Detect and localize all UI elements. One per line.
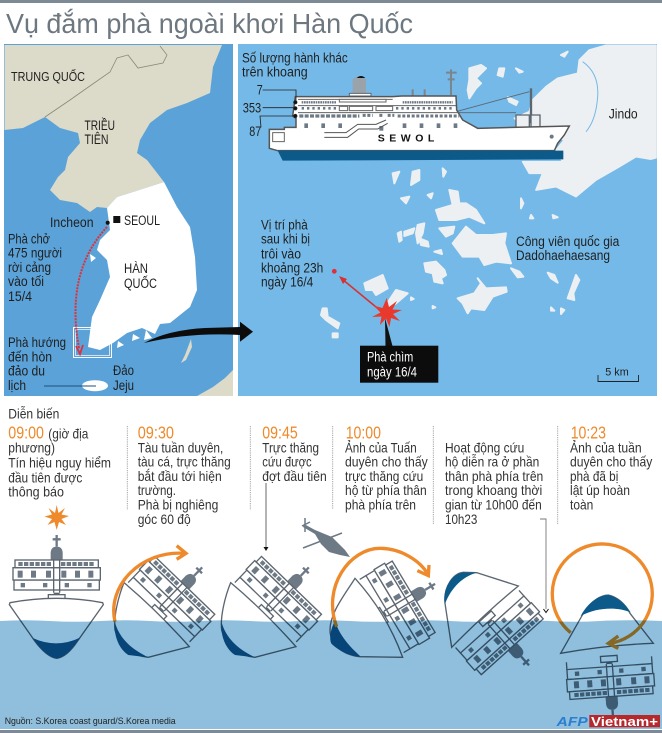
label: Incheon: Incheon <box>50 215 94 230</box>
arrow: first rescue <box>264 483 268 551</box>
event 09:45: cứu được <box>262 454 312 470</box>
label: national park <box>516 234 620 263</box>
top rule <box>0 0 662 3</box>
event 10:00: 10:00 <box>346 422 381 442</box>
arrow: rescue zone <box>540 519 548 612</box>
event rescue window: trong khoang thời <box>445 482 542 498</box>
source: Nguồn: S.Korea coast guard/S.Korea media <box>5 716 176 727</box>
callout: sinking <box>360 346 438 383</box>
helicopter <box>302 518 350 557</box>
route: red dotted <box>76 227 107 354</box>
leader line: Jeju <box>44 385 96 387</box>
text: passengers per deck <box>242 51 348 80</box>
text: destination <box>8 335 66 393</box>
text: drift position: sau khi bị <box>261 231 310 246</box>
orange rotation arrow: ship 4 <box>333 548 429 627</box>
ship 6: capsized <box>561 595 657 725</box>
orange rotation arrow: ship 6 <box>552 544 652 648</box>
scale bar <box>598 367 638 382</box>
passenger leader lines <box>260 90 297 127</box>
ship name: SEWOL <box>378 133 435 145</box>
event 09:30: 09:30 <box>138 422 174 442</box>
heading: timeline: Diễn biến <box>8 405 59 421</box>
event 10:00: duyên cho thấy <box>345 454 428 470</box>
ship 1: upright <box>9 535 103 658</box>
event 09:45: 09:45 <box>262 422 298 442</box>
island: Jeju <box>82 380 108 391</box>
scale bar: 5 km <box>605 367 629 379</box>
event rescue window: Hoạt động cứu <box>445 439 524 455</box>
callout pointer <box>385 318 392 346</box>
text: destination: đến hòn <box>8 350 52 364</box>
ship 3: tilted with helicopter rescue <box>221 537 340 657</box>
arrow: drift direction <box>339 276 376 307</box>
panel: Korea map <box>4 44 233 396</box>
label: Trieu Tien <box>84 118 115 147</box>
event 09:30: tàu cá, trực thăng <box>138 454 231 470</box>
panel: detail map <box>238 44 657 396</box>
event 10:23: 10:23 <box>571 422 606 442</box>
label: national park: Công viên quốc gia <box>516 234 620 249</box>
event 09:00: (giờ địa <box>48 425 88 441</box>
timeline illustration <box>0 518 662 729</box>
ship: Sewol profile <box>269 69 569 161</box>
text: ferry departure: rời cảng <box>8 260 51 275</box>
event 09:45: đợt đầu tiên <box>262 468 327 484</box>
event 09:00: đầu tiên được <box>8 469 82 485</box>
event 09:30: góc 60 độ <box>138 511 191 527</box>
event 10:00: trực thăng cứu <box>345 468 423 484</box>
event 10:23 <box>570 422 652 512</box>
event rescue window: gian từ 10h00 đến <box>445 496 542 512</box>
event 09:30: Tàu tuần duyên, <box>138 439 223 455</box>
event 09:30 <box>138 422 231 527</box>
land: South Korea <box>88 182 197 350</box>
event 09:00: 09:00 <box>8 422 44 442</box>
event 10:00 <box>345 422 428 512</box>
event 09:00: phương) <box>8 440 55 456</box>
text: ferry departure: 15/4 <box>8 289 32 304</box>
marker: Seoul <box>113 216 120 223</box>
marker: Incheon <box>106 221 110 225</box>
event rescue window: 10h23 <box>445 511 477 527</box>
label: Han Quoc: QUỐC <box>124 276 157 291</box>
label: national park: Dadohaehaesang <box>516 248 610 263</box>
label: Seoul: SEOUL <box>124 213 160 228</box>
callout: sinking: Phà chìm <box>367 350 413 365</box>
label: Trung Quoc: TRUNG QUỐC <box>11 69 85 84</box>
deck counts: 87 <box>249 124 261 139</box>
text: passengers per deck: Số lượng hành khác <box>242 51 348 66</box>
event 10:00: phà phía trên <box>345 496 416 512</box>
label: Trieu Tien: TRIỀU <box>84 118 115 133</box>
arrow: map link <box>144 322 253 343</box>
marker: drift position <box>332 269 337 274</box>
logo: AFP: AFP <box>556 714 588 729</box>
ship 5: overturning <box>444 572 561 695</box>
text: drift position: trôi vào <box>261 246 301 261</box>
text: drift position: Vị trí phà <box>261 217 308 232</box>
bottom rule <box>0 730 662 733</box>
label: Han Quoc <box>124 261 157 291</box>
land: Jindo <box>514 45 657 197</box>
event 09:00: thông báo <box>8 484 64 500</box>
icon: sinking star <box>372 298 402 327</box>
text: drift position: khoảng 23h <box>261 260 323 275</box>
event 10:23: phà đã bị <box>570 468 618 484</box>
label: Han Quoc: HÀN <box>124 261 148 276</box>
ship 4: heavily tilted <box>330 546 458 657</box>
label: Trieu Tien: TIÊN <box>84 132 108 147</box>
text: drift position <box>261 217 323 290</box>
text: passengers per deck: trên khoang <box>242 65 308 80</box>
event 09:45: Trực thăng <box>262 439 319 455</box>
deck counts: 353 <box>243 101 261 116</box>
deck counts <box>243 82 263 139</box>
event 10:23: Ảnh của tuần <box>570 439 642 455</box>
label: Jeju: Jeju <box>113 378 134 393</box>
event 10:00: Ảnh của Tuấn <box>345 439 417 455</box>
text: destination: Phà hướng <box>8 335 66 350</box>
text: ferry departure: Phà chở <box>8 232 50 246</box>
title: Vụ đắm phà ngoài khơi Hàn Quốc <box>6 8 413 39</box>
logo: Vietnam+: Vietnam+ <box>591 714 658 729</box>
event 09:00 <box>8 422 111 500</box>
event 10:00: hộ từ phía thân <box>345 482 427 498</box>
border lines <box>45 46 167 117</box>
islands: south group <box>321 190 579 337</box>
text: destination: đảo du <box>8 364 45 379</box>
text: drift position: ngày 16/4 <box>261 275 314 290</box>
event 09:00: Tín hiệu nguy hiểm <box>8 454 111 470</box>
event rescue window: hộ diễn ra ở phần <box>445 454 539 470</box>
sea <box>0 620 662 729</box>
event 09:30: trường. <box>138 482 176 498</box>
orange rotation arrow: ship 2 <box>114 546 186 622</box>
event 09:30: Phà bị nghiêng <box>138 496 218 512</box>
text: ferry departure: vào tối <box>8 274 44 289</box>
event 10:23: toàn <box>570 496 593 512</box>
locator box <box>74 328 112 358</box>
label: Jeju <box>113 363 134 393</box>
text: destination: lịch <box>8 378 26 393</box>
text: ferry departure: 475 người <box>8 246 62 260</box>
deck counts: 7 <box>257 82 263 97</box>
label: Jeju: Đảo <box>113 363 134 378</box>
icon: distress star <box>44 505 69 530</box>
land: Tsushima and Japan <box>181 339 233 396</box>
callout: sinking: ngày 16/4 <box>367 365 417 380</box>
islands: north group <box>393 52 568 208</box>
event 09:45 <box>262 422 327 484</box>
text: ferry departure <box>8 232 62 304</box>
event 09:30: bắt đầu tới hiện <box>138 468 222 484</box>
event 10:23: lật úp hoàn <box>570 482 630 498</box>
land: China and North Korea <box>4 45 222 212</box>
event rescue window: thân phà phía trên <box>445 468 543 484</box>
event rescue window <box>445 439 543 527</box>
label: Jindo: Jindo <box>609 106 638 121</box>
ship 2: tilted <box>115 537 234 657</box>
timeline dividers <box>127 426 558 524</box>
